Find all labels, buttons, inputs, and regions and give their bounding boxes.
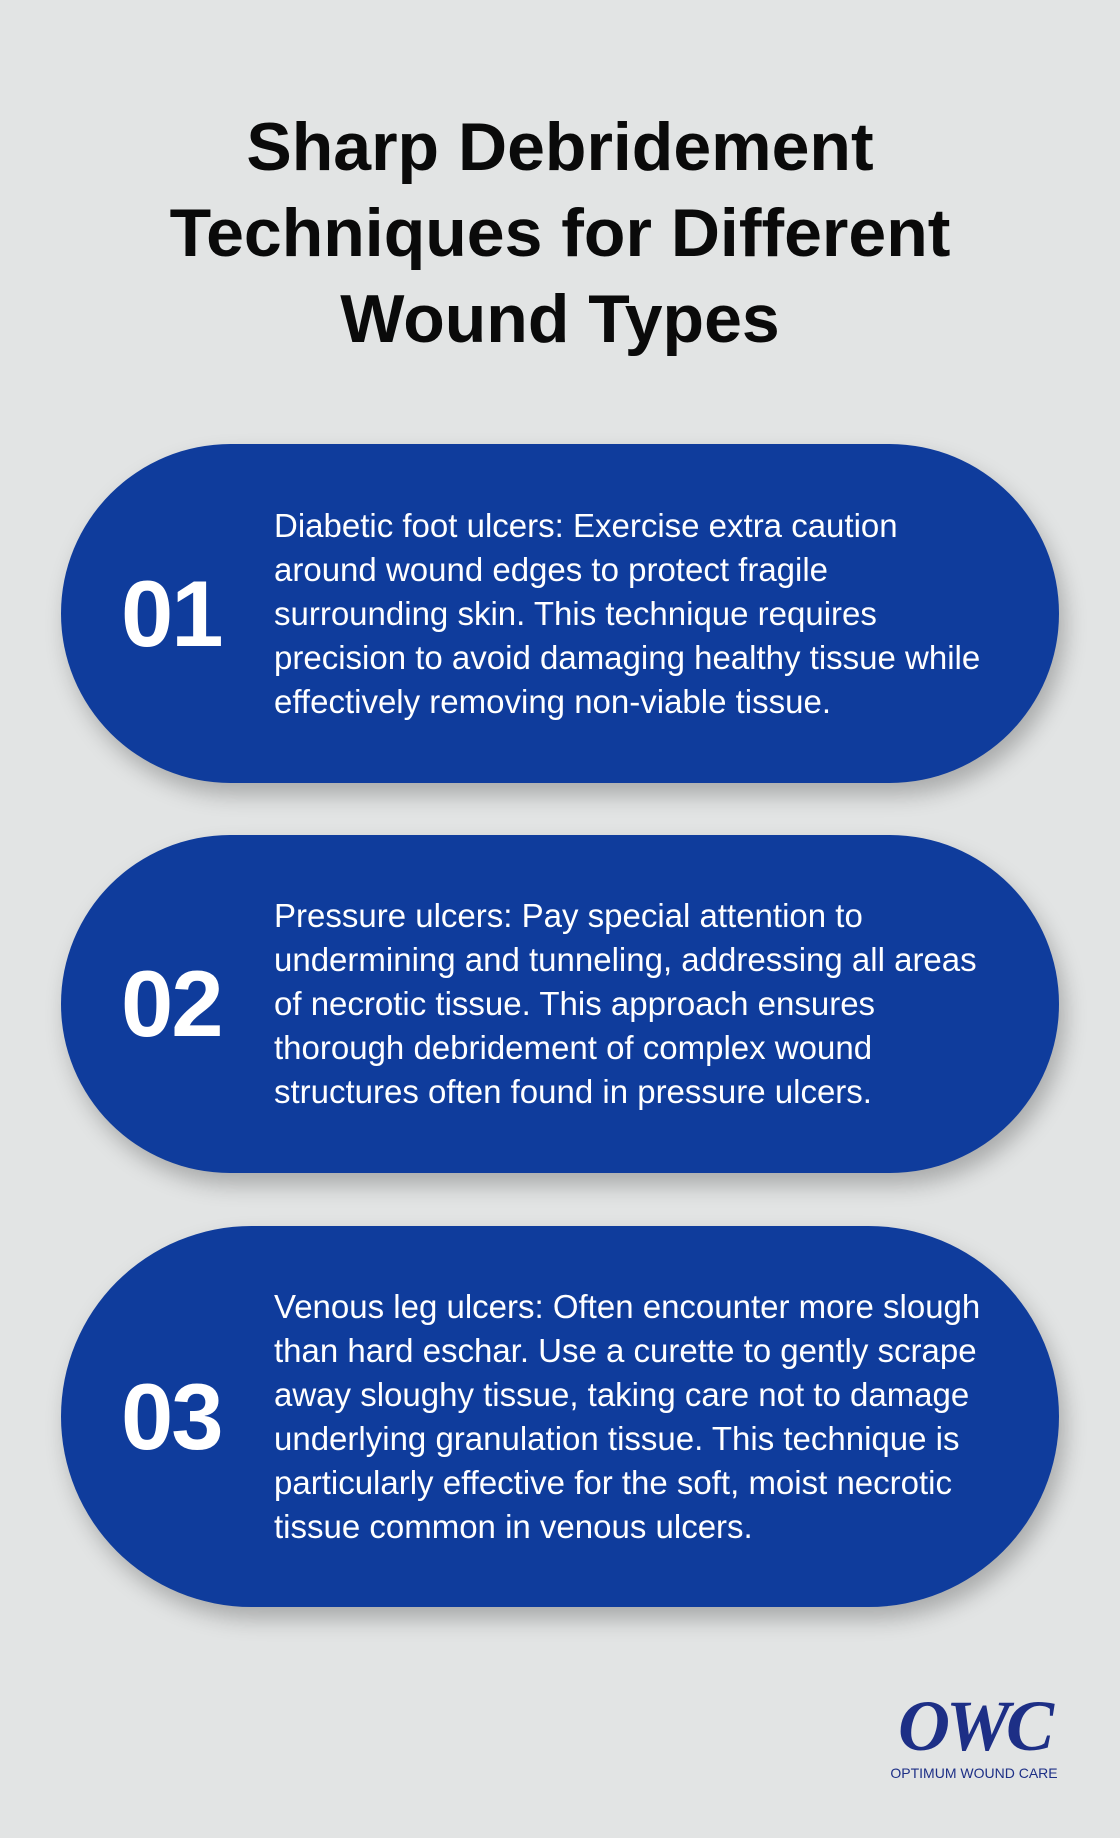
title bbox=[170, 109, 950, 357]
panel: 03 venous leg ulcers bbox=[61, 1226, 1059, 1607]
number 03: 03 bbox=[121, 1364, 222, 1468]
panel: 02 pressure ulcers bbox=[61, 835, 1059, 1173]
text 03 bbox=[274, 1288, 980, 1544]
text 01: Diabetic foot ulcers: Exercise extra caution bbox=[274, 506, 898, 544]
text 02 bbox=[274, 897, 977, 1110]
title: Wound Types bbox=[340, 281, 780, 357]
panel: 01 diabetic foot ulcers bbox=[61, 444, 1059, 783]
text 02: of necrotic tissue. This approach ensures bbox=[274, 985, 875, 1022]
text 02: Pressure ulcers: Pay special attention to bbox=[274, 897, 863, 934]
text 01: effectively removing non-viable tissue. bbox=[274, 682, 831, 720]
number 01: 01 bbox=[121, 560, 222, 666]
text 03: than hard eschar. Use a curette to gently scrape bbox=[274, 1332, 977, 1368]
text 03: particularly effective for the soft, moist necrotic bbox=[274, 1464, 952, 1500]
text 03: Venous leg ulcers: Often encounter more slough bbox=[274, 1288, 980, 1324]
text 02: structures often found in pressure ulcers. bbox=[274, 1073, 872, 1110]
text 02: thorough debridement of complex wound bbox=[274, 1029, 872, 1066]
text 01: around wound edges to protect fragile bbox=[274, 550, 828, 588]
logo: OPTIMUM WOUND CARE bbox=[890, 1765, 1058, 1781]
number 02: 02 bbox=[121, 951, 222, 1056]
text 03: away sloughy tissue, taking care not to damage bbox=[274, 1376, 969, 1412]
text 03: tissue common in venous ulcers. bbox=[274, 1508, 753, 1544]
text 01: surrounding skin. This technique requires bbox=[274, 594, 877, 632]
title: Sharp Debridement bbox=[246, 109, 874, 185]
text 02: undermining and tunneling, addressing all areas bbox=[274, 941, 977, 978]
logo: OWC bbox=[898, 1686, 1050, 1766]
text 03: underlying granulation tissue. This technique is bbox=[274, 1420, 959, 1456]
text 01 bbox=[274, 506, 980, 720]
title: Techniques for Different bbox=[170, 195, 950, 271]
text 01: precision to avoid damaging healthy tissue while bbox=[274, 638, 980, 676]
